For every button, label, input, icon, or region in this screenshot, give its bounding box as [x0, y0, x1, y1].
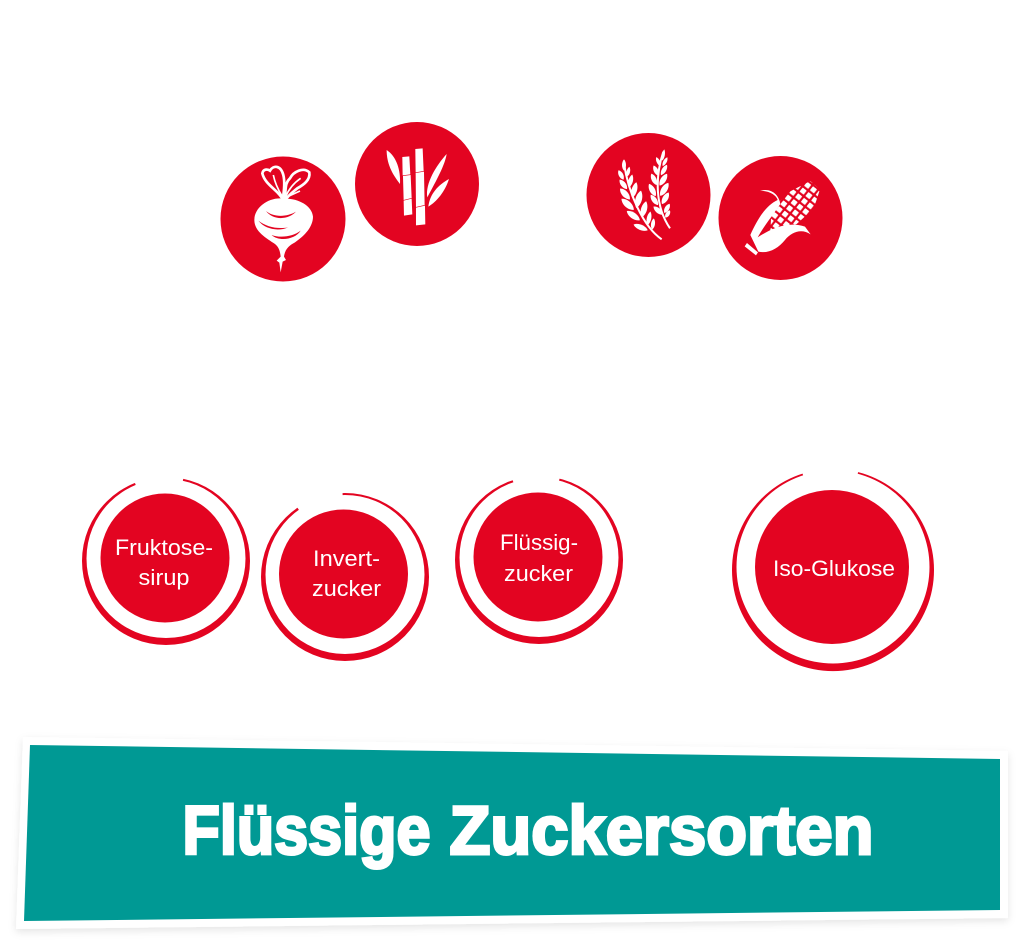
badge: Iso-Glukose: Iso-Glukose — [773, 556, 895, 581]
icon: wheat — [586, 133, 710, 257]
badge: Invertzucker: zucker — [312, 576, 382, 601]
badge: Iso-Glukose — [732, 453, 934, 671]
badge: Invertzucker — [261, 474, 429, 661]
icon: corn cob — [718, 156, 842, 280]
title: Flüssige — [182, 792, 430, 869]
badge: Fruktosesirup: sirup — [138, 565, 190, 590]
badge: Flüssigzucker: zucker — [504, 561, 574, 586]
badge: Flüssigzucker — [455, 461, 623, 644]
badge: Fruktosesirup — [82, 461, 250, 645]
title: Zuckersorten — [450, 792, 874, 869]
badge: Flüssigzucker: Flüssig- — [500, 530, 578, 555]
icon: sugar cane — [355, 122, 479, 246]
banner: title — [16, 737, 1008, 929]
badge: Invertzucker: Invert- — [313, 546, 380, 571]
icon: sugar beet — [220, 156, 346, 282]
badge: Fruktosesirup: Fruktose- — [115, 535, 213, 560]
